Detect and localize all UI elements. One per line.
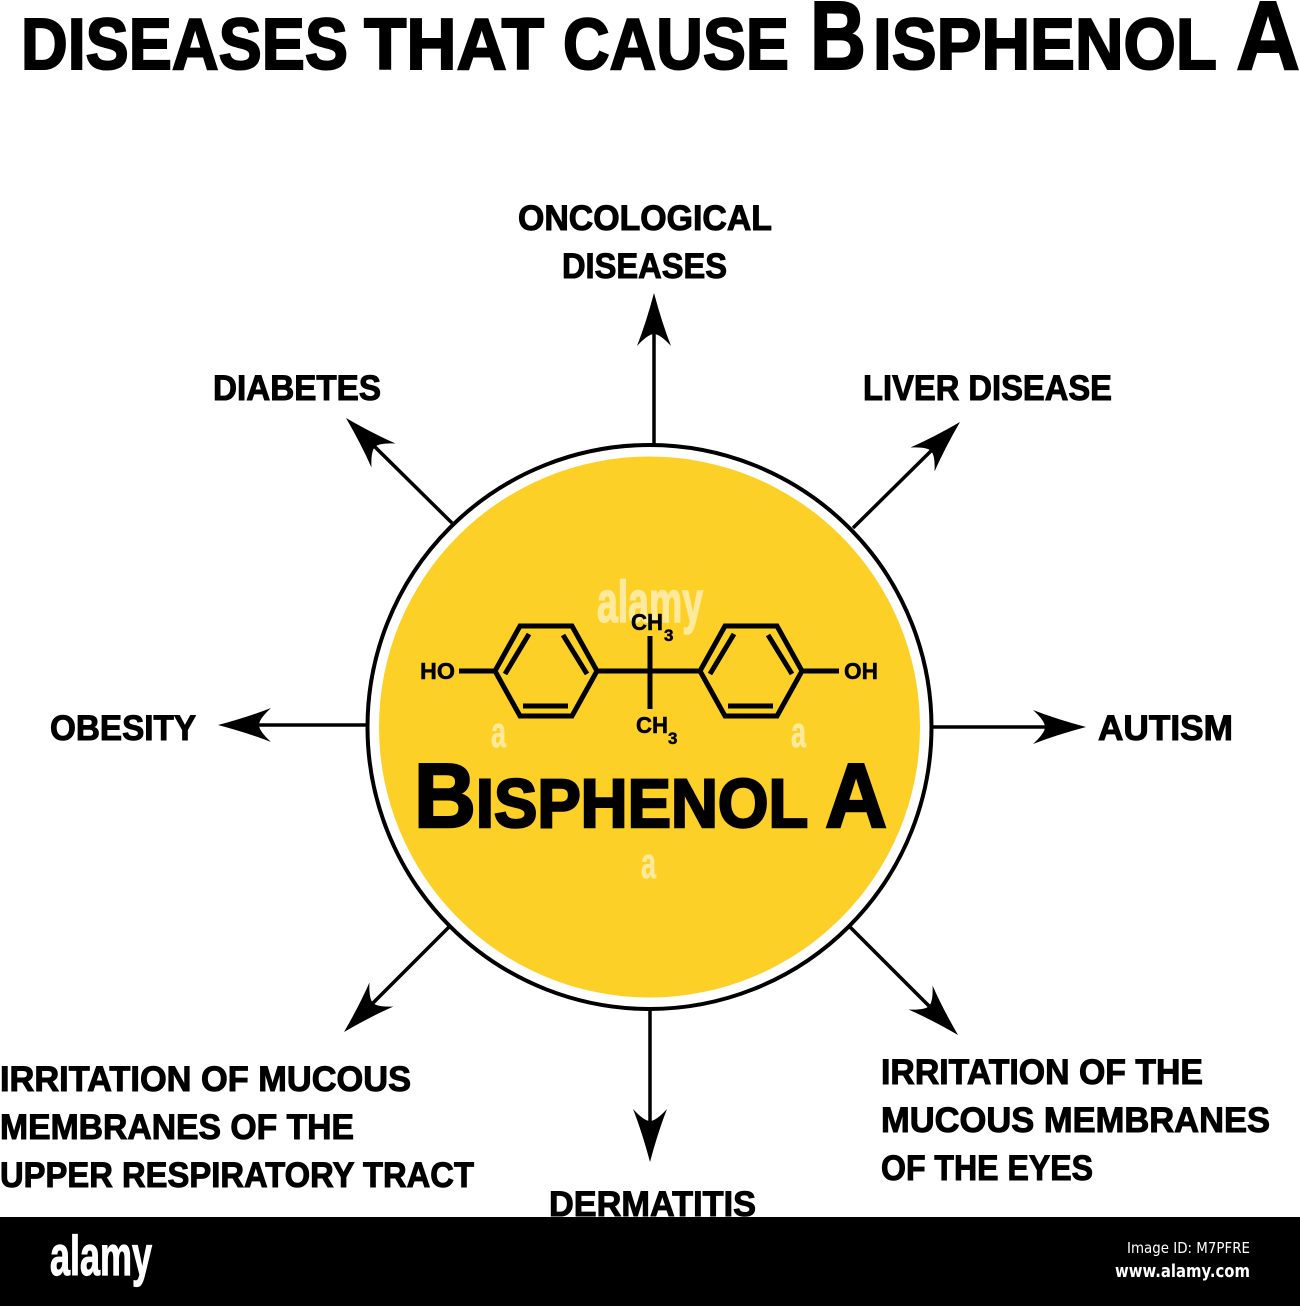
label: irritation of upper respiratory tract [0,1060,474,1195]
arrow: to obesity [218,708,367,742]
label: oncological diseases [518,199,772,286]
title: THAT [364,5,544,85]
label: diabetes: DIABETES [213,369,381,408]
left benzene ring [495,626,597,716]
hydroxyl label right: OH [844,658,878,684]
watermark: alamy on circle: alamy [597,570,703,635]
arrow: up to oncological diseases [637,293,671,444]
label: irritation of upper respiratory tract: IRRITATION OF MUCOUS [0,1060,411,1099]
methyl label top: CH [631,609,663,635]
right benzene ring [700,626,802,716]
molecule bonds [459,636,839,709]
label: irritation of the eyes: MUCOUS MEMBRANES [881,1101,1270,1140]
label: autism: AUTISM [1098,709,1233,748]
label: irritation of upper respiratory tract: UPPER RESPIRATORY TRACT [0,1156,474,1195]
label: irritation of the eyes: OF THE EYES [881,1149,1093,1188]
title [21,0,1300,90]
watermark: alamy on circle: a [791,708,806,757]
label: oncological diseases: ONCOLOGICAL [518,199,772,238]
watermark: alamy on circle: a [491,708,506,757]
arrow: to irritation of the eyes [850,927,970,1047]
label: irritation of the eyes: IRRITATION OF THE [881,1053,1203,1092]
arrow: to autism [932,710,1086,744]
title: ISPHENOL [873,5,1217,85]
label: dermatitis: DERMATITIS [549,1185,756,1224]
arrow: to irritation of upper respiratory tract [332,927,449,1044]
label: irritation of upper respiratory tract: MEMBRANES OF THE [0,1108,354,1147]
footer url: www.alamy.com [1115,1261,1250,1282]
molecule: bisphenol A structure [420,609,878,748]
methyl label bottom: CH [636,712,668,738]
footer image id: Image ID: M7PFRE [1127,1239,1250,1257]
arrow: to liver disease [853,410,972,528]
title: DISEASES [21,5,348,85]
label: irritation of the eyes [881,1053,1270,1188]
hydroxyl label left: HO [420,658,455,684]
title: CAUSE [563,5,789,85]
circle heading: BISPHENOL A [414,746,887,847]
label: liver disease: LIVER DISEASE [863,369,1112,408]
watermark: alamy on circle [491,570,806,888]
arrow: to dermatitis [633,1010,667,1162]
footer logo: alamy: alamy [50,1224,152,1287]
methyl subscript top: 3 [664,626,673,645]
arrow: to diabetes [334,406,452,523]
label: oncological diseases: DISEASES [562,247,727,286]
footer bar [0,1217,1300,1306]
methyl subscript bottom: 3 [668,729,677,748]
watermark: alamy on circle: a [641,839,656,888]
label: obesity: OBESITY [50,709,196,748]
central circle [368,445,932,1009]
